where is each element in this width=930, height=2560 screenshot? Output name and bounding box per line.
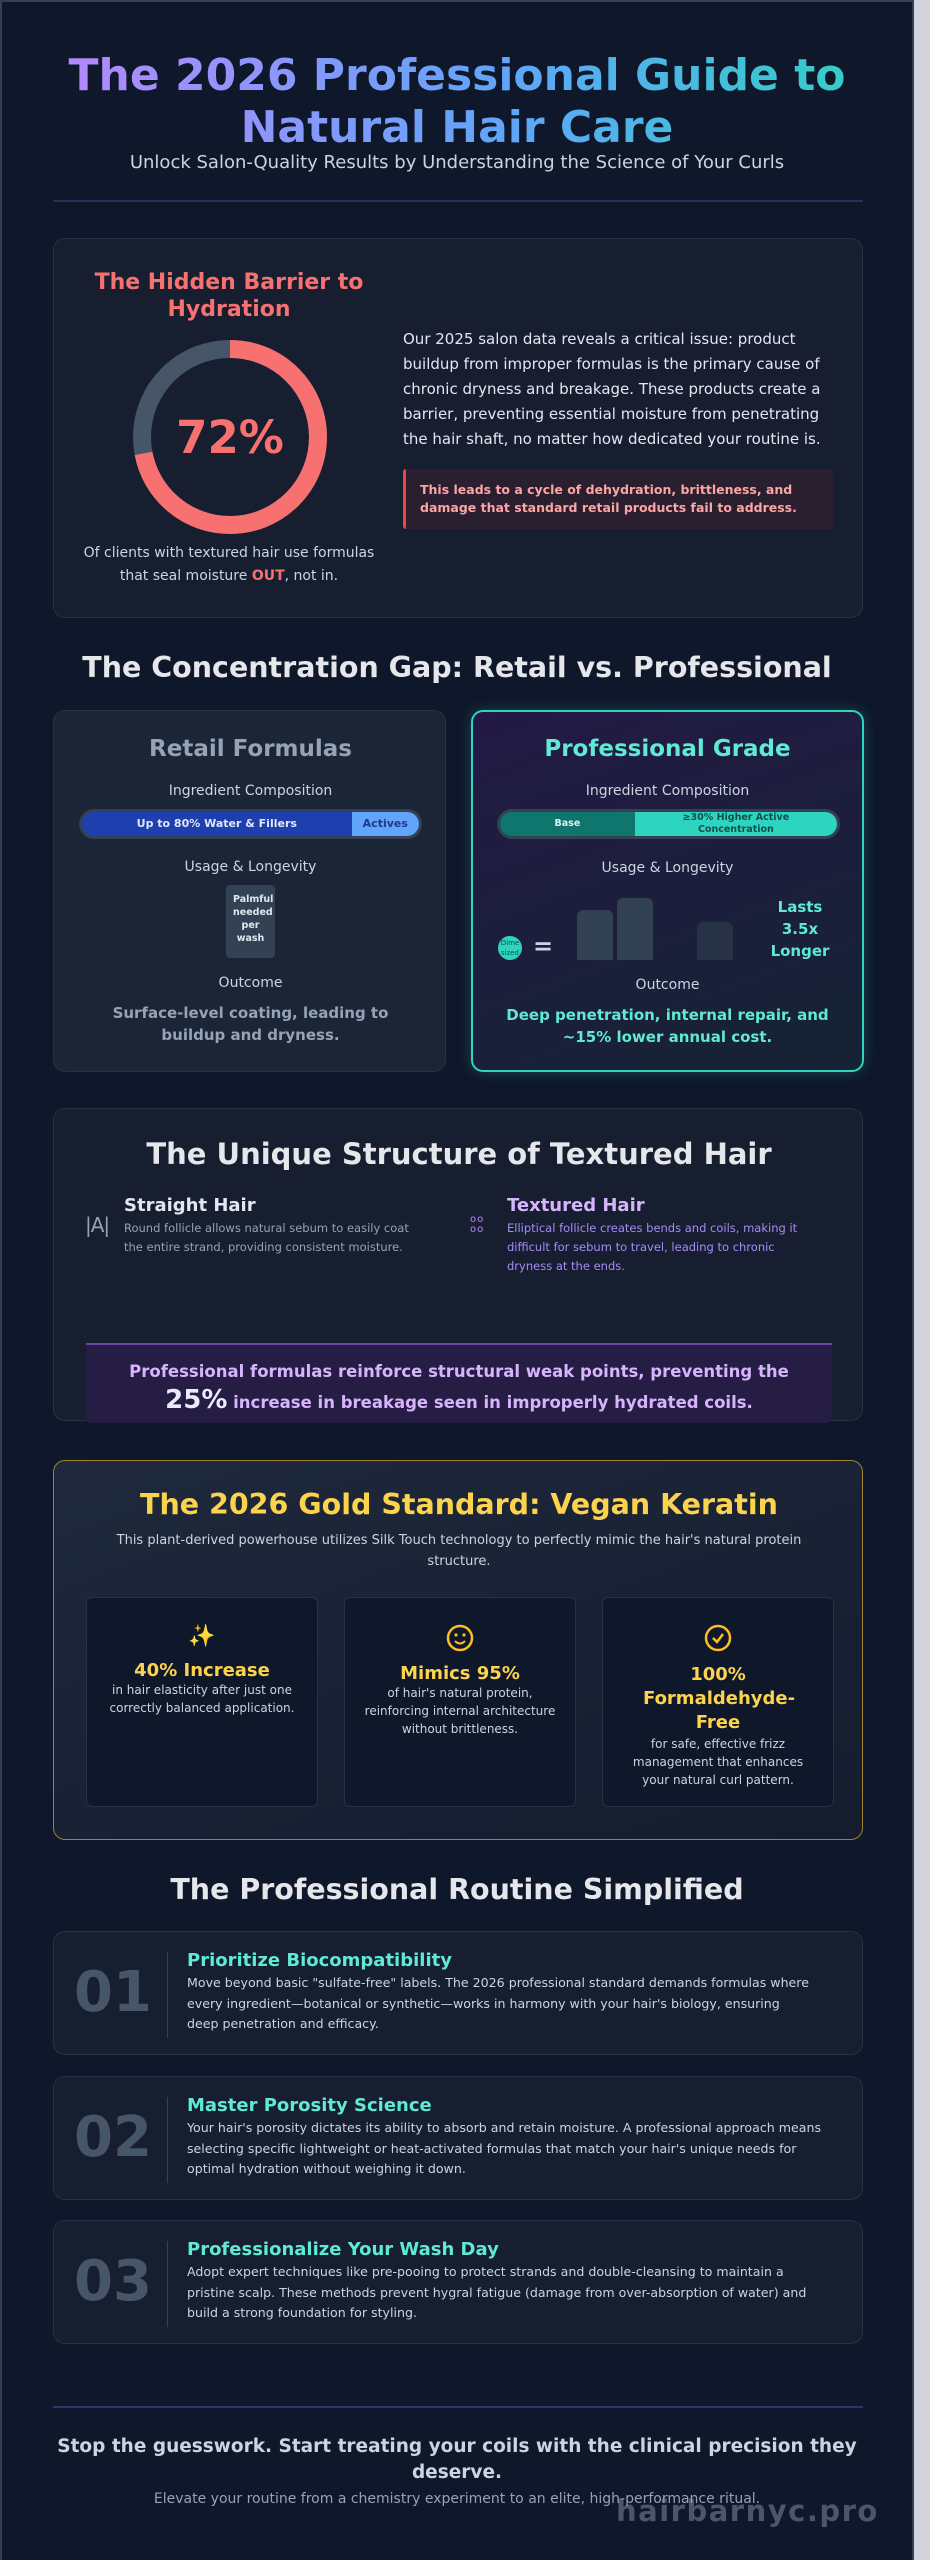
step 02: Your hair's porosity dictates its ability to absorb and retain moisture. A professional approach means selecting specific lightweight or heat-activated formulas that match your hair's unique needs for optimal hydration without weighing it down. [187, 2120, 821, 2176]
icon: textured hair: oo [470, 1224, 484, 1235]
icon: dime-sized dot: Dime sized [501, 939, 519, 957]
title: Natural Hair Care [241, 102, 673, 153]
panel: professional grade [471, 710, 864, 1072]
panel: professional grade: Usage & Longevity [602, 860, 733, 876]
donut chart 72%: 72% [176, 411, 284, 464]
icon: textured hair [470, 1214, 484, 1235]
heading: hidden barrier: The Hidden Barrier to Hydration [95, 270, 363, 322]
retail composition bar [79, 809, 422, 839]
retail title: Retail Formulas [149, 736, 352, 762]
card: 40% increase [86, 1597, 318, 1807]
step 03: Adopt expert techniques like pre-pooing to protect strands and double-cleansing to maintain a pristine scalp. These methods prevent hygral fatigue (damage from over-absorption of water) and build a strong foundation for styling. [187, 2264, 806, 2320]
step 03: 03 [74, 2249, 152, 2314]
icon: dime-sized dot [498, 936, 522, 960]
panel: retail formulas: Outcome [219, 975, 282, 991]
step 02 [53, 2076, 863, 2200]
card: mimics 95%: of hair's natural protein, reinforcing internal architecture without brittleness. [365, 1686, 555, 1736]
step 02: Master Porosity Science [187, 2095, 432, 2116]
heading: routine: The Professional Routine Simplified [170, 1873, 744, 1906]
textured hair block: Textured Hair [507, 1195, 645, 1216]
callout: 25% breakage: Professional formulas reinforce structural weak points, preventing the 25% increase in breakage seen in improperly hydrated coils. [129, 1362, 789, 1415]
textured hair block [507, 1195, 797, 1273]
step 01: Move beyond basic "sulfate-free" labels. The 2026 professional standard demands formulas where every ingredient—botanical or synthetic—works in harmony with your hair's biology, ensuring deep penetration and efficacy. [187, 1975, 809, 2031]
callout: 25% breakage [86, 1343, 832, 1423]
professional composition bar: ≥30% Higher Active Concentration [683, 812, 789, 835]
structure heading: The Unique Structure of Textured Hair [146, 1137, 772, 1171]
panel: retail formulas [53, 710, 446, 1072]
panel: unique structure [53, 1108, 863, 1421]
caption: Of clients with textured hair use formulas that seal moisture OUT, not in. [84, 545, 374, 584]
textured hair block: Elliptical follicle creates bends and coils, making it difficult for sebum to travel, leading to chronic dryness at the ends. [507, 1221, 797, 1273]
card: formaldehyde-free: 100% Formaldehyde-Free [643, 1664, 795, 1733]
card: 40% increase: 40% Increase [134, 1660, 270, 1681]
icon: smiley [446, 1624, 474, 1652]
professional composition bar [497, 809, 840, 839]
longevity bars [577, 898, 733, 960]
step 01: 01 [74, 1960, 152, 2025]
step 01 [53, 1931, 863, 2055]
watermark: hairbarnyc.pro [616, 2494, 879, 2528]
step 03 [53, 2220, 863, 2344]
keratin heading: The 2026 Gold Standard: Vegan Keratin [140, 1488, 778, 1521]
retail composition bar: Up to 80% Water & Fillers [137, 817, 297, 830]
subtitle: Unlock Salon-Quality Results by Understanding the Science of Your Curls [130, 152, 784, 173]
footer subtext: Elevate your routine from a chemistry experiment to an elite, high-performance ritual. [154, 2491, 760, 2507]
icon: check circle [704, 1624, 732, 1652]
professional composition bar: Base [555, 818, 580, 829]
step 01: Prioritize Biocompatibility [187, 1950, 452, 1971]
panel: professional grade: Ingredient Composition [586, 783, 749, 799]
card: mimics 95% [344, 1597, 576, 1807]
callout [403, 469, 833, 529]
keratin description: This plant-derived powerhouse utilizes Silk Touch technology to perfectly mimic the hair's natural protein structure. [117, 1533, 801, 1569]
equals sign: = [533, 932, 553, 960]
step 03: Professionalize Your Wash Day [187, 2239, 499, 2260]
professional title: Professional Grade [544, 736, 791, 762]
panel: retail formulas: Ingredient Composition [169, 783, 332, 799]
straight hair block [124, 1195, 409, 1254]
panel: vegan keratin [53, 1460, 863, 1840]
footer call to action: Stop the guesswork. Start treating your coils with the clinical precision they deserve. [57, 2436, 857, 2483]
icon: straight hair: |A| [85, 1213, 109, 1237]
icon: textured hair: oo [470, 1214, 484, 1225]
icon: sparkle: ✨ [188, 1624, 216, 1649]
card: formaldehyde-free: for safe, effective frizz management that enhances your natural curl pattern. [633, 1737, 803, 1787]
straight hair block: Round follicle allows natural sebum to easily coat the entire strand, providing consistent moisture. [124, 1221, 409, 1254]
lasts 3.5x longer: Lasts 3.5x Longer [771, 898, 829, 960]
body text: Our 2025 salon data reveals a critical issue: product buildup from improper formulas is the primary cause of chronic dryness and breakage. These products create a barrier, preventing essential moisture from penetrating the hair shaft, no matter how dedicated your routine is. [403, 330, 821, 448]
card: mimics 95%: Mimics 95% [400, 1663, 520, 1684]
palmful icon: Palmful needed per wash [233, 894, 273, 944]
card: formaldehyde-free [602, 1597, 834, 1807]
step 02: 02 [74, 2105, 152, 2170]
palmful icon [226, 885, 275, 958]
retail composition bar: Actives [363, 817, 408, 830]
panel: retail formulas: Usage & Longevity [185, 859, 316, 875]
straight hair block: Straight Hair [124, 1195, 256, 1216]
title: The 2026 Professional Guide to [68, 50, 845, 101]
panel: hidden barrier [53, 238, 863, 618]
callout: This leads to a cycle of dehydration, brittleness, and damage that standard retail products fail to address. [420, 482, 797, 515]
professional outcome: Deep penetration, internal repair, and ~15% lower annual cost. [506, 1006, 829, 1046]
card: 40% increase: in hair elasticity after just one correctly balanced application. [110, 1683, 294, 1715]
heading: concentration gap: The Concentration Gap: Retail vs. Professional [82, 651, 832, 684]
title [2, 50, 912, 154]
donut chart 72% [133, 340, 327, 534]
panel: professional grade: Outcome [636, 977, 699, 993]
retail outcome: Surface-level coating, leading to buildup and dryness. [113, 1004, 388, 1044]
